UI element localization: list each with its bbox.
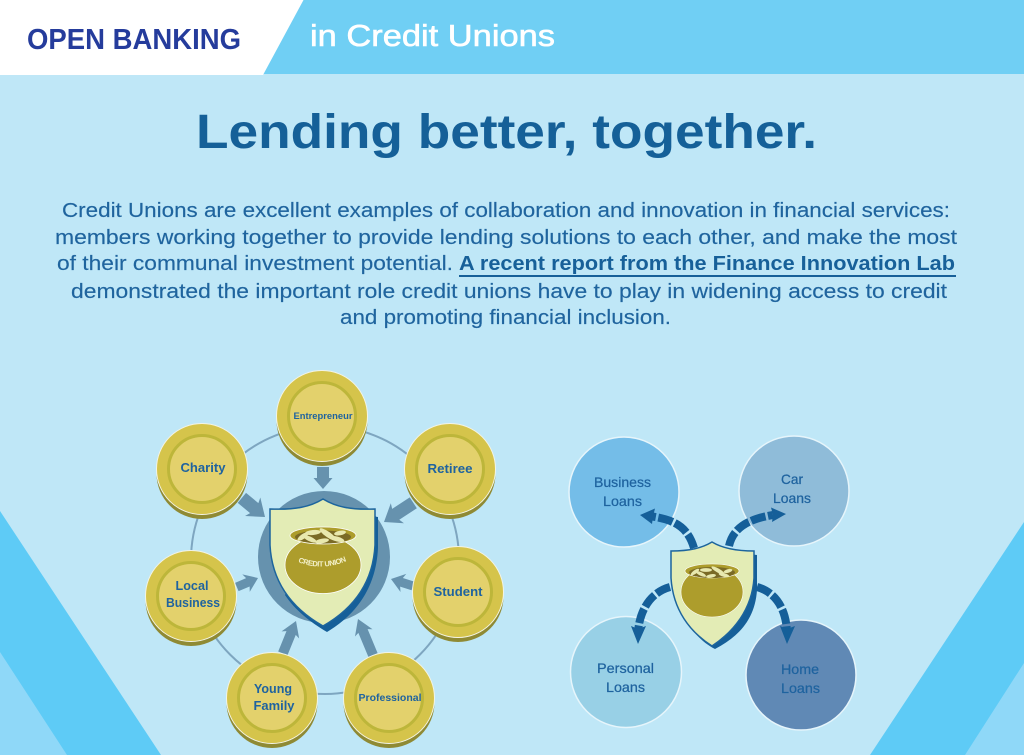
- coin: young family: [226, 652, 318, 748]
- shield with pot: credit union: [269, 498, 378, 632]
- header bar: [0, 0, 1024, 75]
- coin: professional: Professional: [358, 692, 422, 704]
- gold coins in pot: [296, 526, 346, 544]
- coin: student: Student: [434, 584, 483, 599]
- loan circle: home: Loans: [781, 680, 820, 696]
- coin: entrepreneur: Entrepreneur: [294, 411, 353, 422]
- coin: local business: Local: [176, 578, 208, 593]
- loan circle: personal: [570, 616, 682, 728]
- intro paragraph: Credit Unions are excellent examples of collaboration and innovation in financial services:: [62, 199, 950, 222]
- coin: professional: [344, 652, 434, 748]
- arrow: young family to centre: [274, 617, 305, 657]
- loan circle: car: [739, 436, 849, 546]
- intro paragraph: of their communal investment potential.: [57, 252, 453, 275]
- arrow: to personal loans: [631, 587, 670, 644]
- arrow: retiree to centre: [377, 493, 420, 532]
- intro paragraph: and promoting financial inclusion.: [340, 306, 671, 329]
- pot label: CREDIT UNION: [298, 556, 346, 566]
- background band: left: [0, 511, 161, 755]
- arrow: student to centre: [388, 570, 416, 595]
- intro paragraph: demonstrated the important role credit unions have to play in widening access to credit: [71, 280, 947, 303]
- title: Lending better, together.: [196, 106, 817, 159]
- loan circle: car: Loans: [773, 490, 811, 506]
- background band: right: [870, 522, 1024, 755]
- loan circle: personal: Loans: [606, 679, 645, 695]
- coin: young family: Young: [254, 681, 292, 696]
- arrow: to car loans: [729, 508, 786, 546]
- diagram: loan types: [569, 436, 856, 730]
- coin: student: [412, 546, 504, 642]
- coin: retiree: Retiree: [428, 461, 472, 476]
- report link: A recent report from the Finance Innovation Lab: [459, 253, 955, 275]
- loan circle: car: Car: [781, 471, 803, 487]
- loan circle: business: Loans: [603, 493, 642, 509]
- intro paragraph: [55, 199, 957, 329]
- arrow: to business loans: [640, 508, 694, 548]
- gold coins in pot: [690, 565, 733, 579]
- intro paragraph: members working together to provide lending solutions to each other, and make the most: [55, 226, 957, 249]
- coin: local business: [146, 550, 236, 646]
- arrow: entrepreneur to centre: [314, 467, 332, 489]
- loan circle: home: Home: [781, 661, 819, 677]
- header subtitle: in Credit Unions: [310, 18, 555, 53]
- coin: retiree: [404, 424, 496, 519]
- shield with pot: [671, 542, 757, 649]
- header brand: open banking: OPEN BANKING: [27, 24, 241, 56]
- arrow: professional to centre: [349, 615, 382, 659]
- loan circle: home: [746, 620, 856, 730]
- loan circle: business: Business: [594, 474, 651, 490]
- loan circle: personal: Personal: [597, 660, 654, 676]
- coin: local business: Business: [166, 596, 220, 610]
- coin: charity: [156, 424, 248, 519]
- coin: entrepreneur: [276, 370, 368, 466]
- arrow: to home loans: [757, 587, 795, 644]
- arrow: local business to centre: [233, 569, 262, 596]
- coin: charity: Charity: [180, 460, 226, 475]
- arrow: charity to centre: [234, 489, 273, 526]
- loan circle: business: [569, 437, 679, 547]
- coin: young family: Family: [254, 698, 295, 713]
- diagram: credit union members: [145, 370, 504, 748]
